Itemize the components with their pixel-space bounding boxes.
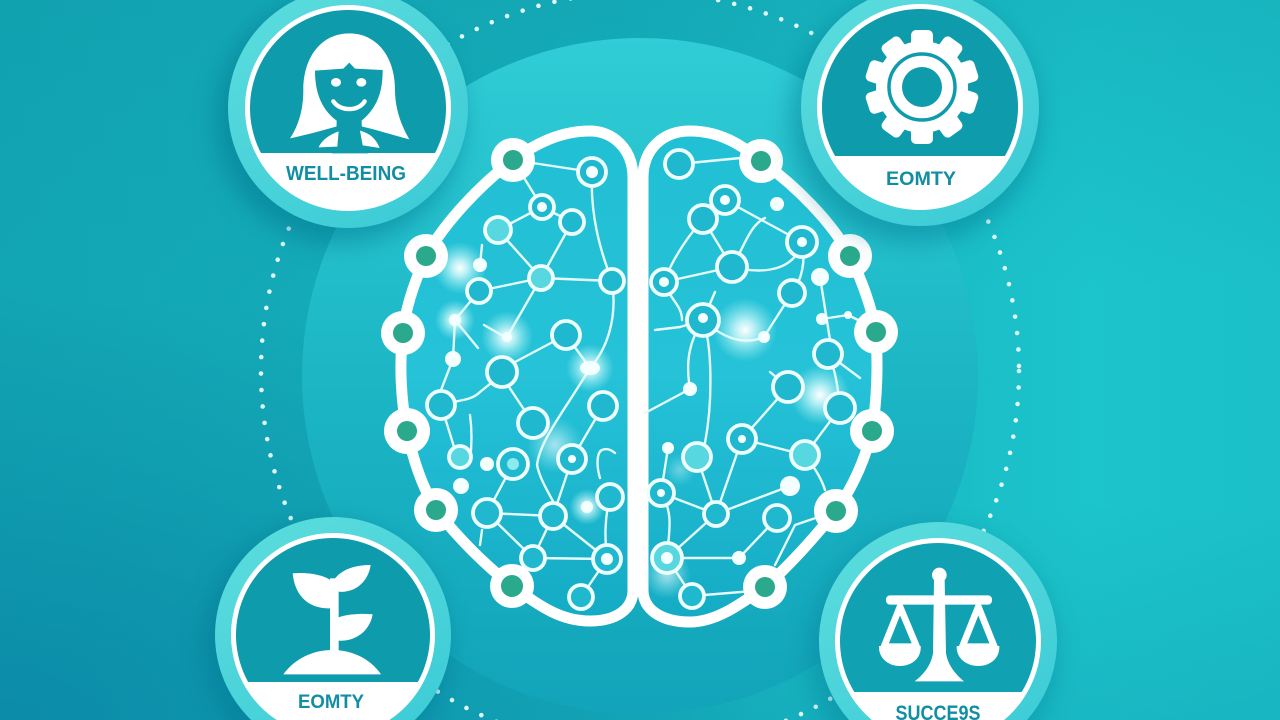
right lobe nodes <box>648 150 855 608</box>
label: equity bottom: EOMTY <box>298 692 364 713</box>
left lobe outline <box>401 131 633 621</box>
green hubs <box>381 138 898 609</box>
label: well-being: WELL-BEING <box>286 163 406 185</box>
badge: scales <box>808 522 1057 720</box>
right lobe outline <box>643 131 877 622</box>
dotted orbit ring <box>261 0 1019 720</box>
icon: gear <box>864 30 980 144</box>
left lobe nodes <box>427 158 624 609</box>
badge: equity gear <box>790 0 1039 243</box>
icon: balance scales <box>879 568 999 681</box>
badge: well-being <box>216 0 468 244</box>
icon: woman <box>290 33 409 153</box>
right lobe glows <box>643 298 850 599</box>
icon: sprout <box>283 565 381 674</box>
brain <box>381 131 898 622</box>
left lobe glows <box>434 242 614 525</box>
label: equity top: EOMTY <box>886 169 956 190</box>
left lobe connections <box>441 160 615 597</box>
badge: plant <box>202 517 451 720</box>
right lobe connections <box>645 156 862 596</box>
central circle <box>302 38 978 714</box>
